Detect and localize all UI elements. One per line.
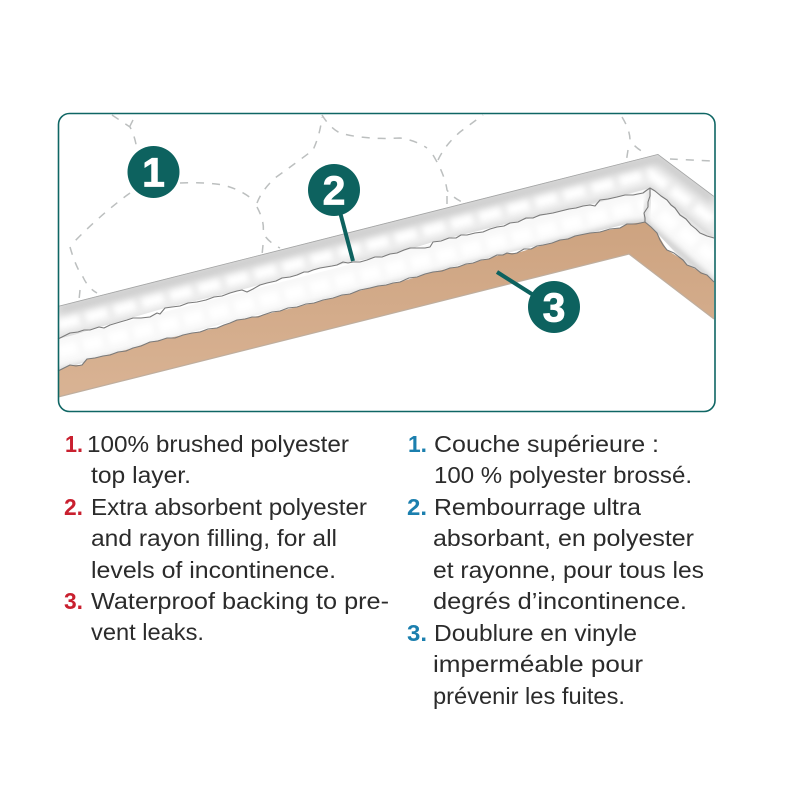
item 1 English: top layer. [91, 462, 191, 488]
jagged layer divider lines [58, 188, 714, 371]
item 2 French [407, 494, 704, 614]
item 3 French: 3. [407, 620, 427, 646]
layer 3: waterproof backing [58, 222, 714, 397]
item 2 French: Rembourrage ultra [434, 494, 641, 520]
item 1 French: Couche supérieure : [434, 431, 659, 457]
layer 2: absorbent filling [58, 188, 714, 372]
item 3 French: imperméable pour [433, 651, 643, 677]
English text block [64, 431, 389, 645]
item 2 English: and rayon filling, for all [91, 525, 337, 551]
callout 3 with leader line [497, 272, 580, 333]
item 1 French [408, 431, 692, 488]
item 1 English: 100% brushed polyester [87, 431, 349, 457]
French text block [407, 431, 704, 709]
item 1 French: 100 % polyester brossé. [434, 462, 692, 488]
item 2 French: 2. [407, 494, 427, 520]
item 3 English: vent leaks. [91, 619, 204, 645]
item 2 English [64, 494, 367, 583]
quilting dashed pattern [70, 115, 714, 300]
panel: pad cross-section illustration [58, 114, 715, 412]
item 2 French: absorbant, en polyester [433, 525, 694, 551]
layer 1: brushed polyester top layer [58, 154, 714, 340]
callout 3 with leader line: 3 [543, 284, 565, 330]
item 1 English [65, 431, 349, 488]
item 2 French: et rayonne, pour tous les [433, 557, 704, 583]
item 3 English: Waterproof backing to pre- [91, 588, 389, 614]
item 3 English: 3. [64, 588, 83, 614]
panel border [58, 114, 715, 412]
callout 1 [128, 146, 180, 198]
item 2 English: 2. [64, 494, 83, 520]
callout 1: 1 [142, 150, 165, 196]
callout 2 with leader line: 2 [323, 168, 345, 214]
item 3 French [407, 620, 643, 709]
item 1 French: 1. [408, 431, 427, 457]
callout 2 with leader line [308, 164, 360, 261]
item 2 English: levels of incontinence. [91, 557, 336, 583]
item 3 French: prévenir les fuites. [433, 683, 625, 709]
item 3 English [64, 588, 389, 645]
item 1 English: 1. [65, 431, 83, 457]
item 2 English: Extra absorbent polyester [91, 494, 367, 520]
item 3 French: Doublure en vinyle [434, 620, 637, 646]
item 2 French: degrés d’incontinence. [433, 588, 687, 614]
